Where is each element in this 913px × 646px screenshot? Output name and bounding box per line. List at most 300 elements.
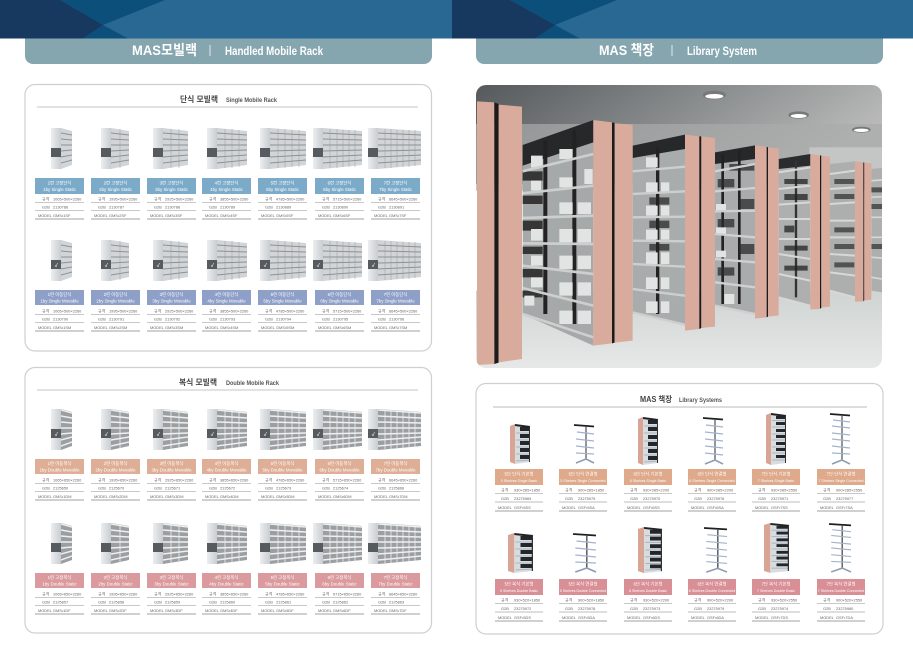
card: 7련 고정복식: G2B: [378, 600, 386, 604]
card: 5단 복식 연결형: GSF•5DA: [578, 615, 595, 620]
card: 6련 이동복식: 규격: [322, 478, 330, 482]
card: 1련 이동단식: MODEL: [38, 325, 53, 330]
card: 6단 복식 기본형: MODEL: [627, 615, 642, 620]
header band: left: [0, 0, 452, 38]
card: 5단 복식 기본형: 930×520×1850: [514, 598, 541, 602]
card: 5련 이동단식: 2130794: [276, 316, 292, 322]
card: 7단 단식 연결형: G2B: [823, 496, 831, 501]
card: 2련 고정복식: 규격: [98, 592, 106, 596]
card: 4련 이동단식: G2B: [209, 316, 217, 322]
card: 1련 고정복식: 규격: [42, 592, 50, 596]
card: 1련 이동복식: 1by Double Movable: [39, 468, 80, 472]
card: 7단 단식 연결형: 900×285×2550: [836, 488, 863, 492]
heading: 복식 모빌랙: Double Mobile Rack: [226, 381, 280, 387]
card: 5단 복식 연결형: 규격: [565, 598, 573, 602]
card: 3련 이동복식: [147, 409, 196, 500]
card: 2련 이동복식: 2by Double Movable: [95, 468, 136, 472]
card: 7련 이동복식: 2125866: [389, 486, 404, 490]
card: 2련 이동복식: MODEL: [94, 494, 109, 499]
card: 5련 고정단식: GMS•5SF: [276, 213, 294, 218]
card: 4련 고정복식: 규격: [209, 592, 217, 596]
card: 5단 단식 기본형: 5단 단식 기본형: [504, 470, 534, 478]
card: 5단 단식 연결형: GSF•5SA: [578, 505, 595, 510]
card: 3련 이동단식: [147, 240, 196, 331]
card: 5련 이동단식: 5련 이동단식: [271, 291, 294, 298]
card: 5단 복식 연결형: 5 Shelves Double Connected: [560, 589, 606, 593]
card: 3련 이동복식: 3련 이동복식: [160, 460, 183, 467]
card: 1련 이동단식: GMS•1SM: [53, 325, 71, 330]
card: 5련 이동복식: 규격: [265, 478, 273, 482]
card: 7련 고정단식: 2130891: [389, 204, 404, 210]
card: 1련 이동단식: 1065×500×2260: [53, 308, 82, 314]
card: 1련 이동단식: 1by Single Movable: [40, 298, 79, 304]
card: 7련 이동복식: [368, 409, 421, 500]
card: 6련 고정복식: [313, 523, 364, 614]
card: 5련 고정복식: MODEL: [261, 608, 276, 613]
title bar: MAS모빌랙: Handled Mobile Rack: [225, 44, 323, 58]
card: 1련 고정복식: G2B: [42, 600, 50, 604]
card: 6단 복식 기본형: [624, 527, 672, 621]
card: 6련 고정복식: 2125862: [333, 600, 348, 604]
card: 7단 복식 연결형: 7 Shelves Double Connected: [818, 589, 864, 593]
card: 7단 복식 기본형: 23275974: [771, 606, 789, 611]
card: 1련 이동복식: 1065×650×2260: [53, 478, 82, 482]
card: 2련 이동단식: 1995×500×2260: [109, 308, 138, 314]
title bar: MAS모빌랙: [25, 38, 432, 64]
card: 6련 고정단식: 6by Single Static: [323, 187, 357, 192]
card: 7련 고정복식: 7by Double Static: [378, 582, 414, 586]
card: 7단 단식 기본형: GSF•7SS: [771, 505, 788, 510]
card: 6련 고정복식: 5715×650×2260: [333, 592, 362, 596]
card: 4련 고정복식: 4련 고정복식: [215, 574, 238, 581]
card: 1련 고정단식: 1065×500×2260: [53, 196, 82, 202]
card: 7련 이동단식: 7by Single Movable: [376, 298, 415, 304]
card: 3련 이동단식: G2B: [154, 316, 162, 322]
title bar: MAS모빌랙: MAS모빌랙: [132, 42, 197, 58]
card: 3련 이동단식: 규격: [154, 308, 162, 314]
card: 2련 이동복식: 규격: [98, 478, 106, 482]
card: 5단 복식 기본형: G2B: [501, 606, 509, 611]
card: 3련 이동단식: 3련 이동단식: [160, 291, 183, 298]
card: 5단 단식 기본형: 5 Shelves Single Basic: [501, 479, 537, 483]
card: 4련 이동복식: GMS•4DM: [220, 494, 238, 499]
card: 1련 이동복식: G2B: [42, 486, 50, 490]
card: 7단 단식 기본형: G2B: [758, 496, 766, 501]
card: 5단 단식 연결형: 5 Shelves Single Connected: [560, 479, 606, 483]
card: 6단 단식 연결형: G2B: [694, 496, 702, 501]
card: 6련 이동복식: [313, 409, 364, 500]
card: 1련 고정복식: [35, 523, 84, 614]
card: 7련 고정복식: 6645×650×2260: [389, 592, 418, 596]
card: 3련 이동복식: 규격: [154, 478, 162, 482]
card: 6련 고정단식: GMS•6SF: [333, 213, 351, 218]
card: 7단 복식 기본형: 7단 복식 기본형: [761, 580, 791, 588]
card: 1련 이동단식: 1련 이동단식: [48, 291, 71, 298]
card: 6단 단식 기본형: 6단 단식 기본형: [633, 470, 663, 478]
card: 7련 이동단식: G2B: [378, 316, 386, 322]
card: 1련 고정단식: 2130786: [53, 204, 68, 210]
card: 6단 단식 연결형: 규격: [694, 488, 702, 492]
card: 1련 고정단식: [35, 128, 84, 219]
card: 6련 고정단식: 규격: [322, 196, 330, 202]
card: 6련 이동복식: 2125674: [333, 486, 349, 490]
card: 1련 고정단식: MODEL: [38, 213, 53, 218]
card: 5련 고정단식: [258, 128, 307, 219]
card: 6련 이동복식: 6련 이동복식: [328, 460, 351, 467]
panel: double mobile rack: [25, 368, 432, 633]
card: 6단 복식 기본형: 930×520×2200: [643, 598, 670, 602]
card: 5련 이동복식: 4785×650×2260: [276, 478, 305, 482]
card: 7련 이동복식: 6645×650×2260: [389, 478, 418, 482]
card: 2련 고정단식: 2련 고정단식: [104, 180, 127, 186]
card: 6련 이동단식: 5715×500×2260: [333, 308, 362, 314]
card: 4련 이동단식: 4by Single Movable: [207, 298, 246, 304]
card: 2련 고정단식: 2130787: [109, 204, 124, 210]
card: 7단 복식 기본형: MODEL: [755, 615, 770, 620]
card: 4련 고정복식: 3855×650×2260: [220, 592, 249, 596]
card: 5련 고정복식: 4785×650×2260: [276, 592, 305, 596]
card: 4련 이동단식: 2130793: [220, 316, 235, 322]
card: 6련 고정단식: 5715×500×2260: [333, 196, 362, 202]
card: 6단 복식 기본형: GSF•6DS: [643, 615, 660, 620]
card: 7단 단식 연결형: GSF•7SA: [836, 505, 853, 510]
card: 7단 단식 기본형: 23275971: [771, 496, 788, 501]
card: 2련 고정단식: 2by Single Static: [99, 187, 133, 192]
card: 2련 이동단식: 2by Single Movable: [96, 298, 135, 304]
card: 4련 고정단식: 규격: [209, 196, 217, 202]
card: 4련 고정단식: MODEL: [205, 213, 220, 218]
card: 1련 이동복식: [35, 409, 84, 500]
card: 6련 이동복식: G2B: [322, 486, 330, 490]
card: 3련 이동단식: 2925×500×2260: [165, 308, 194, 314]
card: 5련 이동복식: [258, 409, 307, 500]
card: 4련 고정복식: [202, 523, 251, 614]
card: 4련 고정복식: 2125860: [220, 600, 236, 604]
card: 2련 고정단식: G2B: [98, 204, 106, 210]
card: 5련 이동복식: 5by Double Movable: [262, 468, 303, 472]
heading: 단식 모빌랙: Single Mobile Rack: [226, 98, 278, 104]
card: 5련 이동단식: GMS•5SM: [276, 325, 294, 330]
card: 6련 이동단식: [313, 240, 364, 331]
card: 7단 복식 기본형: [752, 523, 800, 621]
card: 4련 이동복식: G2B: [209, 486, 217, 490]
card: 5련 이동복식: MODEL: [261, 494, 276, 499]
card: 6단 복식 기본형: 23275973: [643, 606, 660, 611]
card: 4련 이동복식: MODEL: [205, 494, 220, 499]
card: 5련 고정단식: 5by Single Static: [266, 187, 300, 192]
card: 5련 고정복식: 2125861: [276, 600, 291, 604]
card: 6단 단식 기본형: 규격: [630, 488, 638, 492]
card: 2련 고정복식: GMS•2DF: [109, 608, 127, 613]
card: 1련 고정단식: GMS•1SF: [53, 213, 71, 218]
card: 6련 이동단식: GMS•6SM: [333, 325, 351, 330]
card: 2련 이동단식: [91, 240, 140, 331]
card: 4련 이동단식: 4련 이동단식: [215, 291, 238, 298]
card: 3련 이동단식: MODEL: [150, 325, 165, 330]
card: 3련 이동단식: 2130792: [165, 316, 180, 322]
card: 6단 단식 연결형: 23275976: [707, 496, 724, 501]
card: 2련 이동복식: 2125670: [109, 486, 125, 490]
card: 3련 고정단식: GMS•3SF: [165, 213, 183, 218]
card: 7련 이동복식: 규격: [378, 478, 386, 482]
card: 7련 이동단식: 7련 이동단식: [384, 291, 407, 298]
card: 6련 이동단식: 6by Single Movable: [320, 298, 359, 304]
card: 3련 고정단식: 2130788: [165, 204, 180, 210]
card: 7단 단식 연결형: 23275977: [836, 496, 853, 501]
card: 5련 이동단식: 규격: [265, 308, 273, 314]
card: 6련 고정복식: 6by Double Static: [322, 582, 358, 586]
card: 7단 단식 기본형: 930×285×2550: [771, 488, 798, 492]
card: 2련 고정단식: GMS•2SF: [109, 213, 127, 218]
card: 6련 이동단식: G2B: [322, 316, 330, 322]
card: 3련 이동복식: MODEL: [150, 494, 165, 499]
card: 7련 이동복식: MODEL: [374, 494, 389, 499]
card: 1련 이동단식: 2130790: [53, 316, 69, 322]
card: 7련 고정단식: 7by Single Static: [379, 187, 413, 192]
card: 6단 단식 기본형: G2B: [630, 496, 638, 501]
card: 5단 복식 기본형: 23275972: [514, 606, 531, 611]
card: 7단 단식 연결형: 7 Shelves Single Connected: [818, 479, 864, 483]
card: 2련 이동단식: G2B: [98, 316, 106, 322]
card: 5단 복식 기본형: 5 Shelves Double Basic: [500, 589, 538, 593]
card: 6단 단식 연결형: 6단 단식 연결형: [697, 470, 727, 478]
card: 6단 복식 연결형: 23275979: [707, 606, 724, 611]
card: 6련 이동복식: 5715×650×2260: [333, 478, 362, 482]
card: 6단 복식 연결형: GSF•6DA: [707, 615, 724, 620]
card: 7단 복식 기본형: 7 Shelves Double Basic: [757, 589, 795, 593]
panel: single mobile rack: [25, 84, 432, 351]
card: 5단 복식 기본형: GSF•5DS: [514, 615, 531, 620]
title bar: MAS 책장: MAS 책장: [599, 42, 654, 58]
card: 6단 단식 기본형: GSF•6SS: [643, 505, 660, 510]
card: 7단 복식 기본형: G2B: [758, 606, 766, 611]
card: 6련 이동복식: MODEL: [318, 494, 333, 499]
card: 4련 이동복식: 규격: [209, 478, 217, 482]
card: 7련 고정복식: GMS•7DF: [389, 608, 407, 613]
heading: 단식 모빌랙: [37, 94, 418, 108]
card: 7련 고정단식: MODEL: [374, 213, 389, 218]
card: 2련 고정복식: 2125858: [109, 600, 124, 604]
card: 5단 단식 기본형: 23275969: [514, 496, 531, 501]
card: 6련 고정단식: 6련 고정단식: [328, 180, 351, 186]
card: 5련 이동복식: GMS•5DM: [276, 494, 294, 499]
card: 6단 단식 기본형: 23275970: [643, 496, 661, 501]
card: 7련 고정복식: 2125863: [389, 600, 404, 604]
card: 5련 고정단식: 4785×500×2260: [276, 196, 305, 202]
heading: MAS 책장: Library Systems: [679, 398, 723, 404]
card: 2련 고정복식: G2B: [98, 600, 106, 604]
card: 5련 이동단식: 4785×500×2260: [276, 308, 305, 314]
card: 2련 이동단식: 2련 이동단식: [104, 291, 127, 298]
card: 7단 복식 연결형: 규격: [823, 598, 831, 602]
card: 4련 이동단식: 3855×500×2260: [220, 308, 249, 314]
card: 6련 고정복식: GMS•6DF: [333, 608, 351, 613]
card: 7련 고정복식: MODEL: [374, 608, 389, 613]
card: 5련 고정단식: 2130889: [276, 204, 291, 210]
card: 3련 고정복식: MODEL: [150, 608, 165, 613]
card: 1련 이동복식: 1련 이동복식: [48, 460, 71, 467]
card: 4련 이동복식: [202, 409, 251, 500]
card: 5련 고정단식: 5련 고정단식: [271, 180, 294, 186]
card: 7단 복식 연결형: 900×520×2550: [836, 598, 863, 602]
card: 1련 이동복식: MODEL: [38, 494, 53, 499]
card: 3련 고정복식: 3by Double Static: [154, 582, 190, 586]
card: 7단 단식 연결형: 규격: [823, 488, 831, 492]
card: 2련 고정복식: 1995×650×2260: [109, 592, 138, 596]
card: 3련 고정복식: G2B: [154, 600, 162, 604]
card: 5련 이동단식: G2B: [265, 316, 273, 322]
card: 6단 단식 기본형: [624, 417, 672, 511]
card: 2련 고정복식: [91, 523, 140, 614]
title bar: MAS 책장: [476, 38, 883, 64]
card: 7련 이동단식: [368, 240, 421, 331]
card: 5단 복식 연결형: MODEL: [562, 615, 577, 620]
card: 4련 이동복식: 2125672: [220, 486, 235, 490]
card: 5단 단식 기본형: 규격: [501, 488, 509, 492]
card: 1련 이동복식: GMS•1DM: [53, 494, 71, 499]
card: 1련 고정복식: GMS•1DF: [53, 608, 71, 613]
card: 5련 고정복식: [258, 523, 307, 614]
card: 4련 이동복식: 3855×650×2260: [220, 478, 249, 482]
card: 6련 이동복식: 6by Double Movable: [319, 468, 360, 472]
card: 7단 단식 기본형: MODEL: [755, 505, 770, 510]
card: 6단 복식 연결형: [688, 528, 736, 621]
card: 2련 고정복식: 2by Double Static: [98, 582, 134, 586]
card: 3련 고정단식: MODEL: [150, 213, 165, 218]
card: 2련 고정단식: [91, 128, 140, 219]
card: 6단 단식 기본형: 930×285×2200: [643, 488, 670, 492]
card: 5단 복식 기본형: 5단 복식 기본형: [504, 580, 534, 588]
card: 7단 복식 기본형: GSF•7DS: [771, 615, 788, 620]
heading: MAS 책장: [493, 394, 867, 408]
card: 1련 고정단식: 1by Single Static: [43, 187, 77, 192]
card: 4련 고정단식: 4련 고정단식: [215, 180, 238, 186]
card: 5련 이동단식: MODEL: [261, 325, 276, 330]
card: 3련 이동복식: 3by Double Movable: [151, 468, 192, 472]
card: 5단 단식 연결형: 규격: [565, 488, 573, 492]
card: 5련 고정복식: GMS•5DF: [276, 608, 294, 613]
card: 3련 고정복식: 3련 고정복식: [160, 574, 183, 581]
card: 5련 이동단식: 5by Single Movable: [263, 298, 302, 304]
card: 3련 고정단식: G2B: [154, 204, 162, 210]
card: 5련 고정복식: 5by Double Static: [265, 582, 301, 586]
card: 6련 고정단식: MODEL: [318, 213, 333, 218]
card: 3련 고정복식: GMS•3DF: [165, 608, 183, 613]
card: 2련 이동복식: 2련 이동복식: [104, 460, 127, 467]
card: 6단 복식 연결형: 900×520×2200: [707, 598, 734, 602]
card: 6단 단식 연결형: [688, 418, 736, 511]
card: 7련 이동단식: MODEL: [374, 325, 389, 330]
card: 1련 고정복식: 1련 고정복식: [48, 574, 71, 581]
card: 3련 고정단식: 3by Single Static: [155, 187, 189, 192]
card: 6단 복식 연결형: 6 Shelves Double Connected: [689, 589, 735, 593]
card: 5련 이동단식: [258, 240, 307, 331]
card: 7단 단식 연결형: 7단 단식 연결형: [826, 470, 856, 478]
card: 4련 고정단식: 3855×500×2260: [220, 196, 249, 202]
card: 7단 복식 기본형: 930×520×2550: [771, 598, 798, 602]
card: 7단 복식 기본형: 규격: [758, 598, 766, 602]
card: 7련 고정단식: 규격: [378, 196, 386, 202]
card: 7단 복식 연결형: 23275980: [836, 606, 854, 611]
card: 1련 이동단식: G2B: [42, 316, 50, 322]
card: 3련 고정복식: 2125859: [165, 600, 180, 604]
card: 5련 고정단식: G2B: [265, 204, 273, 210]
card: 5련 고정복식: G2B: [265, 600, 273, 604]
card: 4련 이동복식: 4by Double Movable: [206, 468, 247, 472]
card: 5단 단식 연결형: MODEL: [562, 505, 577, 510]
card: 4련 고정단식: 4by Single Static: [210, 187, 244, 192]
card: 6련 이동단식: 6련 이동단식: [328, 291, 351, 298]
card: 2련 이동복식: GMS•2DM: [109, 494, 127, 499]
card: 6련 이동단식: MODEL: [318, 325, 333, 330]
card: 5련 고정복식: 5련 고정복식: [271, 574, 294, 581]
card: 7단 복식 연결형: MODEL: [820, 615, 835, 620]
card: 2련 이동단식: GMS•2SM: [109, 325, 127, 330]
card: 6련 이동단식: 규격: [322, 308, 330, 314]
card: 2련 고정단식: MODEL: [94, 213, 109, 218]
heading: 복식 모빌랙: 복식 모빌랙: [179, 377, 217, 387]
card: 4련 이동단식: 규격: [209, 308, 217, 314]
card: 4련 이동단식: MODEL: [205, 325, 220, 330]
card: 7련 이동복식: G2B: [378, 486, 386, 490]
card: 7련 고정단식: [368, 128, 421, 219]
card: 4련 고정단식: G2B: [209, 204, 217, 210]
card: 5단 단식 연결형: [559, 425, 607, 511]
title bar: MAS 책장: Library System: [687, 44, 757, 58]
card: 7련 고정복식: [368, 523, 421, 614]
card: 7단 복식 연결형: G2B: [823, 606, 831, 611]
card: 7련 고정단식: 7련 고정단식: [384, 180, 407, 186]
card: 5단 단식 기본형: GSF•5SS: [514, 505, 531, 510]
card: 3련 고정단식: [147, 128, 196, 219]
card: 2련 이동단식: MODEL: [94, 325, 109, 330]
card: 6단 단식 기본형: MODEL: [627, 505, 642, 510]
card: 5단 복식 연결형: 23275978: [578, 606, 595, 611]
card: 3련 이동복식: 2925×650×2260: [165, 478, 194, 482]
card: 6단 복식 기본형: 규격: [630, 598, 638, 602]
card: 3련 고정복식: 규격: [154, 592, 162, 596]
card: 5단 단식 연결형: 5단 단식 연결형: [568, 470, 598, 478]
card: 4련 고정복식: G2B: [209, 600, 217, 604]
card: 2련 이동단식: 2130791: [109, 316, 124, 322]
card: 4련 고정단식: [202, 128, 251, 219]
card: 5단 단식 연결형: 23275975: [578, 496, 595, 501]
card: 1련 고정복식: MODEL: [38, 608, 53, 613]
card: 7단 단식 연결형: MODEL: [820, 505, 835, 510]
header band: right: [452, 0, 913, 38]
card: 7단 단식 기본형: 7단 단식 기본형: [761, 470, 791, 478]
card: 7단 복식 연결형: [817, 524, 865, 621]
card: 1련 이동복식: 2125650: [53, 486, 69, 490]
card: 5련 이동복식: G2B: [265, 486, 273, 490]
card: 1련 고정단식: G2B: [42, 204, 50, 210]
card: 6단 복식 기본형: G2B: [630, 606, 638, 611]
card: 1련 고정복식: 2125857: [53, 600, 68, 604]
heading: 단식 모빌랙: 단식 모빌랙: [180, 94, 218, 104]
card: 6단 복식 연결형: MODEL: [691, 615, 706, 620]
card: 6단 복식 기본형: 6단 복식 기본형: [633, 580, 663, 588]
card: 5단 복식 기본형: MODEL: [498, 615, 513, 620]
card: 6련 고정단식: G2B: [322, 204, 330, 210]
card: 7련 이동복식: 7련 이동복식: [384, 460, 407, 467]
card: 7단 단식 기본형: [752, 413, 800, 511]
card: 5단 복식 연결형: [559, 534, 607, 621]
card: 1련 이동단식: [35, 240, 84, 331]
card: 5련 고정단식: 규격: [265, 196, 273, 202]
card: 5단 단식 기본형: [495, 424, 543, 511]
card: 6련 고정단식: 2130890: [333, 204, 349, 210]
card: 7단 단식 연결형: [817, 414, 865, 511]
